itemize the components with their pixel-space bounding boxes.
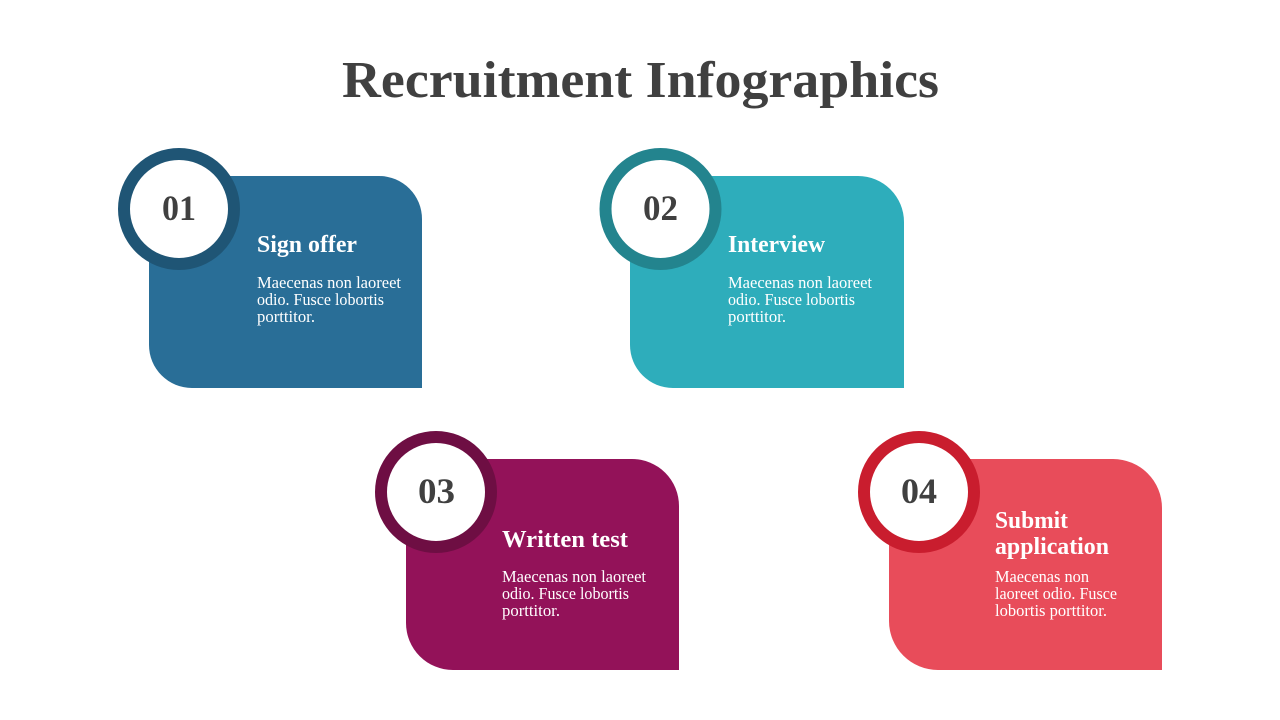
body text 02: Maecenas non laoreet [728,273,872,292]
heading 04: Submit [995,508,1068,534]
heading 04 [995,508,1109,560]
panel: step 02 interview [606,154,904,388]
body text 04: lobortis porttitor. [995,601,1107,620]
body text 04 [995,567,1117,620]
heading 02: Interview [728,232,826,258]
card background 02 [630,176,904,388]
body text 03: Maecenas non laoreet [502,567,646,586]
number badge 03: 03 [418,471,455,511]
body text 02 [728,273,872,326]
number badge 04 [864,437,974,547]
body text 02: odio. Fusce lobortis [728,290,855,309]
body text 03 [502,567,646,620]
body text 01: porttitor. [257,307,315,326]
number badge 02: 02 [643,188,678,228]
body text 03: porttitor. [502,601,560,620]
body text 04: laoreet odio. Fusce [995,584,1117,603]
panel: step 04 submit application [864,437,1162,670]
body text 04: Maecenas non [995,567,1089,586]
body text 01 [257,273,401,326]
heading 01: Sign offer [257,232,357,258]
title: Recruitment Infographics [342,52,939,109]
heading 03: Written test [502,527,628,553]
number badge 01 [124,154,234,264]
number badge 02 [606,154,716,264]
body text 01: Maecenas non laoreet [257,273,401,292]
number badge 04: 04 [901,471,937,511]
number badge 03 [381,437,491,547]
panel: step 03 written test [381,437,679,670]
panel: step 01 sign offer [124,154,422,388]
body text 02: porttitor. [728,307,786,326]
card background 03 [406,459,679,670]
heading 04: application [995,534,1109,560]
body text 01: odio. Fusce lobortis [257,290,384,309]
card background 04 [889,459,1162,670]
number badge 01: 01 [162,188,196,228]
card background 01 [149,176,422,388]
body text 03: odio. Fusce lobortis [502,584,629,603]
